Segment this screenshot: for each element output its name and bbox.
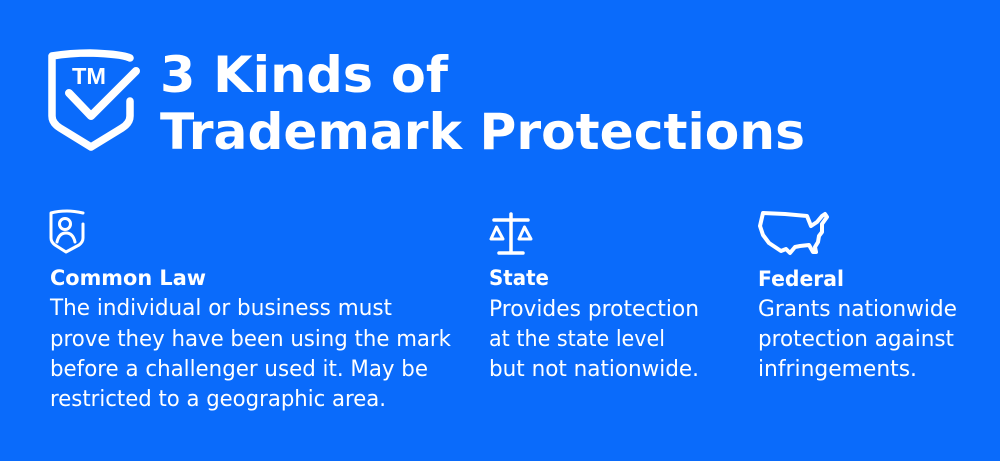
panel: state — [489, 214, 699, 382]
text: common law description: restricted to a geographic area. — [50, 387, 386, 412]
text: common law description: before a challenger used it. May be — [50, 357, 428, 382]
text: state description: at the state level — [489, 327, 665, 352]
icon: USA map outline — [760, 213, 827, 253]
text: federal description: Grants nationwide — [758, 297, 957, 322]
heading: state: State — [489, 266, 549, 290]
text: federal description: infringements. — [758, 357, 917, 382]
icon: scales — [491, 214, 531, 253]
title: Trademark Protections — [160, 103, 805, 161]
panel: federal — [758, 213, 957, 382]
text: state description — [489, 297, 699, 382]
icon: person shield — [51, 211, 83, 252]
text: common law description: prove they have been using the mark — [50, 327, 451, 352]
text: federal description — [758, 297, 957, 382]
text: state description: but not nationwide. — [489, 357, 699, 382]
text: federal description: protection against — [758, 327, 954, 352]
text: state description: Provides protection — [489, 297, 699, 322]
title: 3 Kinds of — [160, 46, 449, 104]
icon: trademark shield with check: TM — [72, 63, 106, 89]
panel: common law — [49, 211, 451, 412]
heading: federal: Federal — [758, 267, 844, 291]
title — [160, 46, 805, 161]
heading: common law: Common Law — [50, 266, 206, 290]
text: common law description — [49, 296, 451, 412]
icon: trademark shield with check — [52, 53, 136, 147]
text: common law description: The individual or business must — [49, 296, 392, 321]
